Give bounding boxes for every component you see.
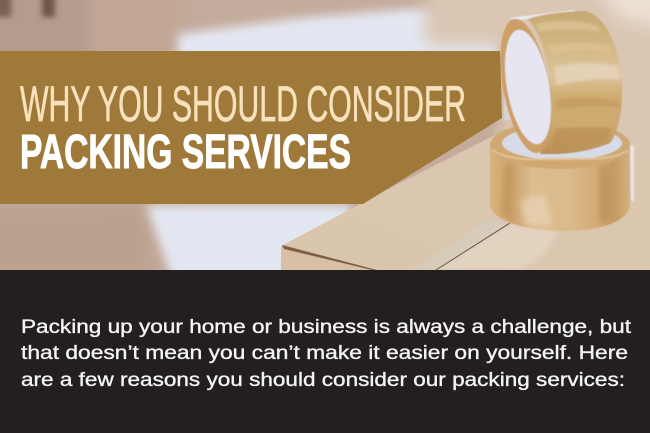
packing tape strip on box bbox=[412, 219, 510, 270]
title line 2: PACKING SERVICES bbox=[20, 126, 351, 179]
intro text bbox=[21, 317, 632, 391]
intro text: are a few reasons you should consider our packing services: bbox=[21, 370, 625, 391]
photo: blurred room background bbox=[0, 0, 650, 285]
tape roll: lower bbox=[490, 121, 634, 231]
box front flap bbox=[281, 246, 375, 270]
intro text: Packing up your home or business is always a challenge, but bbox=[21, 317, 632, 338]
title banner bbox=[0, 51, 502, 204]
tape roll inner core bbox=[497, 26, 559, 148]
tape roll: upper bbox=[492, 10, 622, 157]
box top surface bbox=[281, 135, 650, 270]
cardboard box bbox=[281, 135, 650, 270]
dark intro panel bbox=[0, 270, 650, 433]
intro text: that doesn’t mean you can’t make it easier on yourself. Here bbox=[21, 343, 628, 364]
